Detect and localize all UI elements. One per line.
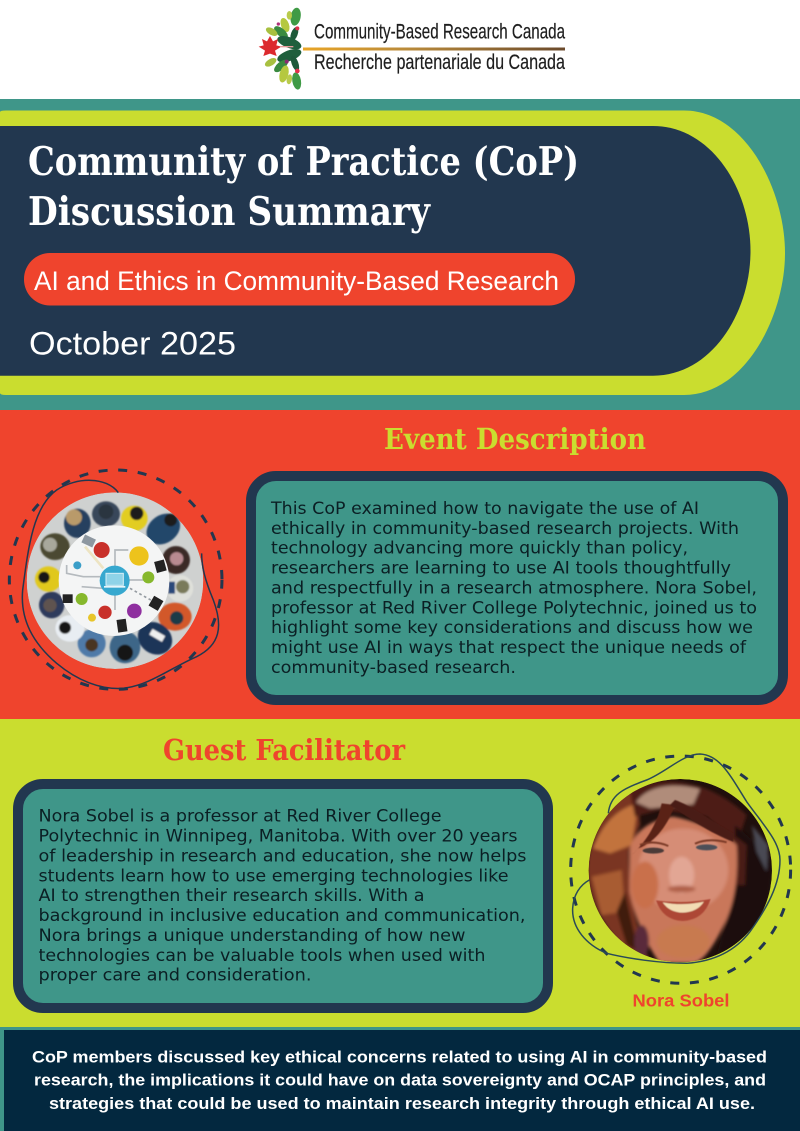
round photo <box>587 779 773 963</box>
footer text <box>32 1048 767 1113</box>
heading: Event Description: Event Description <box>384 422 646 456</box>
text box: facilitator bio: Nora brings a unique understanding of how new <box>38 926 466 946</box>
round photo <box>27 492 203 669</box>
text box: facilitator bio: of leadership in research and education, she now helps <box>38 846 527 866</box>
caption: Nora Sobel: Nora Sobel <box>632 991 730 1011</box>
text box: facilitator bio: proper care and consideration. <box>38 966 312 986</box>
text box: facilitator bio: Nora Sobel is a professor at Red River College <box>38 807 442 827</box>
panel: title banner <box>0 99 800 410</box>
footer teal edge <box>0 1027 800 1131</box>
logo text: English: Community-Based Research Canada <box>314 20 565 43</box>
banner teal background <box>0 99 800 410</box>
illustration: people around a digital table <box>9 470 222 689</box>
logo: Community-Based Research Canada <box>259 7 565 90</box>
background: white logo band <box>0 0 800 99</box>
text box: event description <box>251 476 783 700</box>
footer dark background <box>4 1030 800 1131</box>
text box: event description: researchers are learning to use AI tools thoughtfully <box>271 559 731 579</box>
panel: event description <box>0 410 800 719</box>
heading: Guest Facilitator: Guest Facilitator <box>163 733 406 767</box>
devices <box>154 559 167 573</box>
text box: facilitator bio: AI to strengthen their research skills. With a <box>38 886 424 906</box>
icon: tree of leaves <box>259 7 303 90</box>
dashed ring <box>9 470 222 689</box>
text box: event description: professor at Red River College Polytechnic, joined us to <box>271 598 757 618</box>
bangs <box>638 802 674 849</box>
red background <box>0 410 800 719</box>
text box: facilitator bio <box>18 784 548 1008</box>
curved line <box>573 754 780 963</box>
eyes <box>643 848 664 854</box>
text box: event description: technology advancing more quickly than policy, <box>271 539 688 559</box>
subtitle pill: AI and Ethics in Community-Based Research <box>34 266 559 296</box>
dashed ring <box>571 756 791 983</box>
date: October 2025 <box>29 325 236 361</box>
table <box>59 525 169 636</box>
text box: event description: and respectfully in a research atmosphere. Nora Sobel, <box>271 578 757 598</box>
panel: guest facilitator <box>0 719 800 1027</box>
text box: event description: highlight some key considerations and discuss how we <box>271 618 753 638</box>
panel: discussion summary footer <box>0 1027 800 1131</box>
text box: event description: This CoP examined how to navigate the use of AI <box>270 499 699 519</box>
footer text: CoP members discussed key ethical concerns related to using AI in community-based <box>32 1048 767 1067</box>
logo divider branch <box>303 48 565 50</box>
banner navy shape <box>0 126 750 376</box>
lime background <box>0 719 800 1027</box>
mouth <box>656 899 711 921</box>
footer text: strategies that could be used to maintain research integrity through ethical AI use. <box>49 1094 755 1113</box>
footer text: research, the implications it could have on data sovereignty and OCAP principles, and <box>34 1071 766 1090</box>
curved line <box>22 480 219 688</box>
table icons <box>100 566 130 596</box>
banner lime outline <box>0 110 785 395</box>
title: Community of Practice (CoP) <box>28 139 579 185</box>
title: Discussion Summary <box>28 189 431 235</box>
text box: facilitator bio: background in inclusive education and communication, <box>38 906 526 926</box>
text box: facilitator bio: students learn how to use emerging technologies like <box>38 866 508 886</box>
text box: event description: community-based research. <box>271 658 516 678</box>
logo text: French: Recherche partenariale du Canada <box>314 51 565 74</box>
subtitle pill <box>24 253 575 306</box>
text box: event description: might use AI in ways that respect the unique needs of <box>271 638 747 658</box>
title <box>28 139 579 235</box>
text box: facilitator bio: Polytechnic in Winnipeg, Manitoba. With over 20 years <box>38 827 518 847</box>
text box: facilitator bio: technologies can be valuable tools when used with <box>38 946 486 966</box>
portrait: Nora Sobel <box>571 754 791 983</box>
text box: event description: ethically in community-based research projects. With <box>271 519 739 539</box>
